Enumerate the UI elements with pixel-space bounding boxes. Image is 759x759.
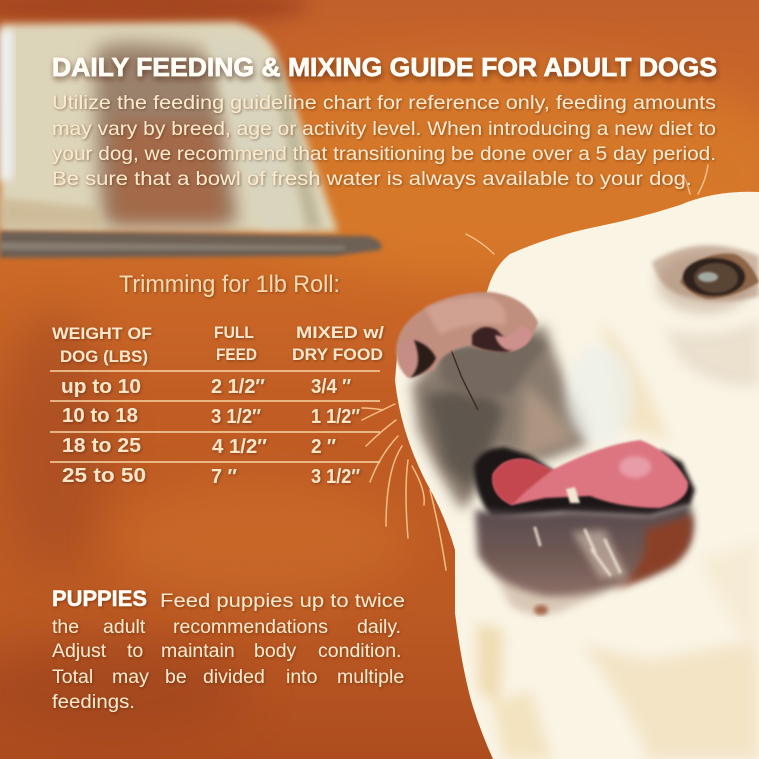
tooth [566, 487, 580, 503]
table rows: 1 1/2″ [311, 406, 360, 428]
puppies text block: Adjust [52, 640, 107, 662]
table rows: 4 1/2″ [212, 436, 267, 458]
nose [396, 292, 538, 378]
title: DAILY FEEDING & MIXING GUIDE FOR ADULT DOGS [52, 54, 717, 82]
table rows [61, 376, 360, 488]
head silhouette [395, 192, 759, 759]
puppies text block: divided [203, 666, 265, 688]
puppies text block [52, 586, 405, 713]
puppies text block: body [254, 640, 297, 662]
table rows: 3 1/2″ [311, 466, 360, 488]
intro text block: Utilize the feeding guideline chart for reference only, feeding amounts [52, 92, 716, 114]
intro text block: your dog, we recommend that transitioning be done over a 5 day period. [52, 143, 716, 165]
puppies text block: maintain [161, 640, 235, 662]
blurred steel dog bowl [0, 22, 382, 258]
puppies text block: feedings. [52, 691, 135, 713]
column headers: DOG (LBS) [60, 347, 148, 366]
table rows: 3 1/2″ [211, 406, 261, 428]
puppies label: PUPPIES [52, 586, 147, 611]
intro text block: may vary by breed, age or activity level. When introducing a new diet to [52, 118, 716, 140]
puppies text block: Total [52, 666, 93, 688]
feeding table [50, 323, 384, 488]
puppies text block: multiple [337, 666, 404, 688]
puppies text block: Feed puppies up to twice [160, 590, 405, 612]
whiskers [362, 165, 708, 570]
dark muzzle [412, 325, 588, 510]
column headers: WEIGHT OF [52, 324, 152, 343]
column headers: DRY FOOD [292, 345, 383, 364]
table rows: 10 to 18 [62, 405, 138, 427]
table heading: Trimming for 1lb Roll: [119, 271, 340, 298]
column headers: MIXED w/ [296, 323, 384, 342]
table rows: 3/4 ″ [311, 376, 351, 398]
puppies text block: condition. [318, 640, 401, 662]
white whisker pad [566, 345, 634, 445]
column headers [52, 323, 384, 366]
puppies text block: into [286, 666, 318, 688]
intro text block: Be sure that a bowl of fresh water is always available to your dog. [52, 168, 692, 190]
puppies text block: to [127, 640, 143, 662]
open mouth [474, 447, 695, 518]
table rows: up to 10 [61, 376, 141, 398]
table rows: 25 to 50 [62, 465, 146, 487]
column headers: FEED [216, 345, 257, 364]
puppies text block: adult [103, 616, 146, 638]
puppies text block: recommendations [173, 616, 328, 638]
puppies text block: be [165, 666, 187, 688]
puppies text block: may [112, 666, 149, 688]
eye patch [652, 245, 759, 313]
puppies text block: daily. [357, 616, 401, 638]
fur shading [477, 320, 759, 759]
lower lip [475, 503, 692, 615]
tongue [493, 440, 688, 508]
table rows: 18 to 25 [62, 435, 141, 457]
table rows: 2 ″ [311, 436, 336, 458]
intro text block [52, 92, 716, 190]
dog portrait [362, 165, 759, 759]
table rows: 2 1/2″ [211, 376, 265, 398]
puppies text block: the [52, 616, 79, 638]
table rows: 7 ″ [211, 466, 237, 488]
table rules [50, 371, 380, 462]
column headers: FULL [214, 323, 254, 342]
